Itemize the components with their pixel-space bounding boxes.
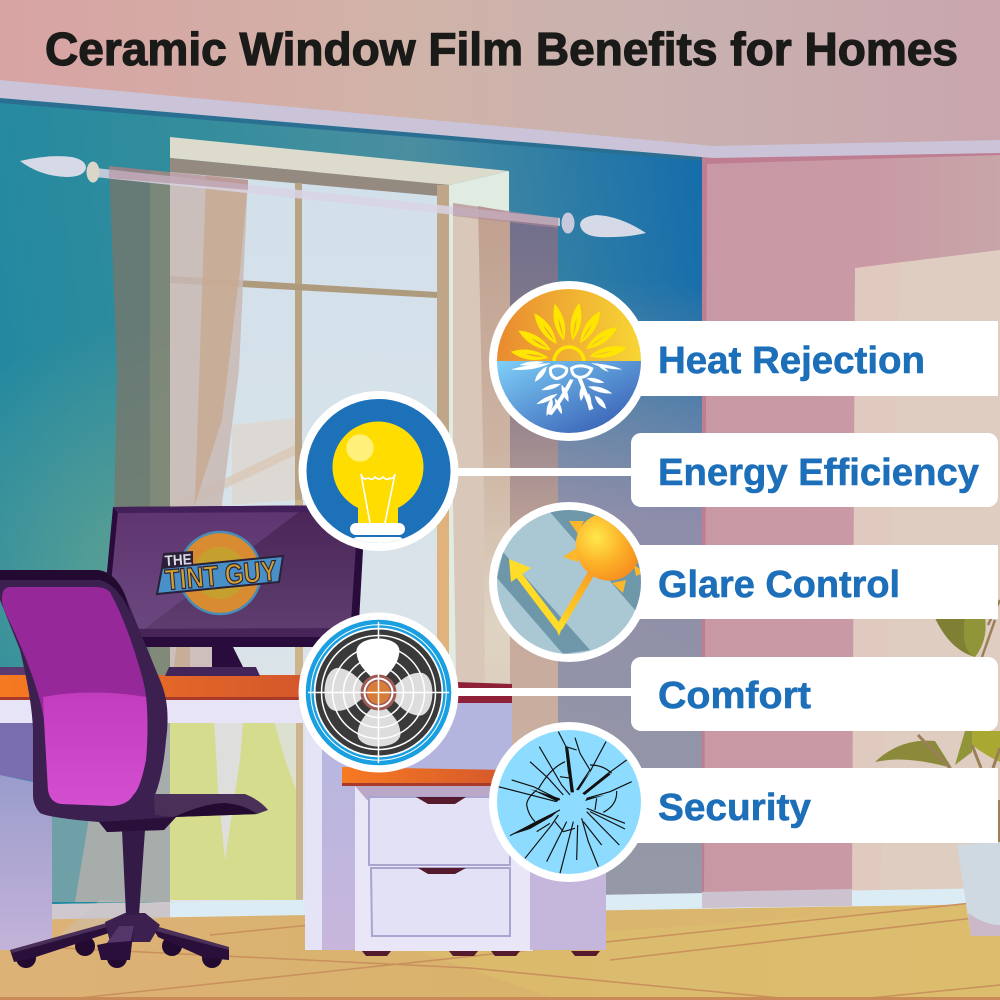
drawer top: [369, 797, 510, 865]
ceiling: [0, 0, 1000, 160]
right wall: [702, 152, 1000, 900]
reflected ray arrow: [518, 574, 559, 628]
label: Glare Control: [630, 545, 998, 619]
drawer bottom: [371, 868, 510, 936]
left leg: [0, 722, 52, 785]
chair back cushion: [2, 587, 147, 806]
chair stem: [122, 830, 145, 915]
label: Comfort: Comfort: [658, 675, 811, 717]
label: Heat Rejection: [630, 321, 998, 396]
icon: light bulb: [298, 391, 458, 551]
fan hub: [360, 674, 396, 710]
label: Security: [630, 768, 998, 843]
icon: fan: [298, 612, 458, 772]
chair armrest: [154, 794, 268, 817]
desk: [0, 667, 606, 956]
connector: energy efficiency: [450, 468, 640, 476]
monitor stand: [212, 647, 243, 667]
floor: [0, 900, 1000, 1000]
office chair: [0, 570, 268, 968]
label: Energy Efficiency: [631, 433, 998, 507]
computer monitor: [100, 505, 363, 676]
connector: comfort: [450, 688, 640, 696]
highlight: [346, 434, 374, 462]
curtain rod and finials: [20, 156, 646, 237]
feet: [362, 951, 600, 956]
bulb glass: [332, 422, 424, 512]
icon: glare control: [489, 502, 641, 662]
left curtain: [60, 166, 248, 935]
crown moulding: [0, 80, 1000, 158]
title: Ceramic Window Film Benefits for Homes: [45, 23, 958, 75]
label: Comfort: [631, 657, 998, 731]
sun: [510, 303, 626, 361]
logo: The Tint Guy: TINT GUY: [164, 555, 278, 597]
window: [52, 137, 509, 903]
left finial: [20, 156, 86, 177]
logo: The Tint Guy: THE: [164, 551, 192, 570]
baseboard: [0, 888, 1000, 920]
pedestal: [305, 720, 329, 950]
back wall: [0, 96, 703, 920]
garden view through window: [170, 700, 296, 900]
desktop surface: [0, 675, 300, 697]
glass bands: [497, 552, 590, 654]
fan blades: [323, 638, 434, 746]
potted plant: [875, 600, 1000, 936]
snowflake: [512, 361, 622, 416]
right finial: [580, 215, 646, 237]
right curtain: [453, 203, 558, 905]
pot: [957, 842, 1000, 936]
fan guard: [308, 622, 449, 763]
icon: sun and snowflake: [489, 281, 649, 441]
label: Glare Control: Glare Control: [658, 564, 900, 606]
sun: [576, 515, 638, 581]
icon: broken glass: [489, 722, 649, 882]
label: Security: Security: [658, 787, 811, 829]
chair base and casters: [10, 913, 229, 968]
filament: [361, 474, 395, 523]
bulb base: [350, 523, 405, 535]
label: Energy Efficiency: Energy Efficiency: [658, 452, 979, 494]
right upper side: [305, 697, 512, 772]
sun rays: [569, 521, 584, 534]
logo: The Tint Guy: [157, 532, 283, 614]
chair seat and frame: [0, 570, 176, 832]
label: Heat Rejection: Heat Rejection: [658, 340, 925, 382]
